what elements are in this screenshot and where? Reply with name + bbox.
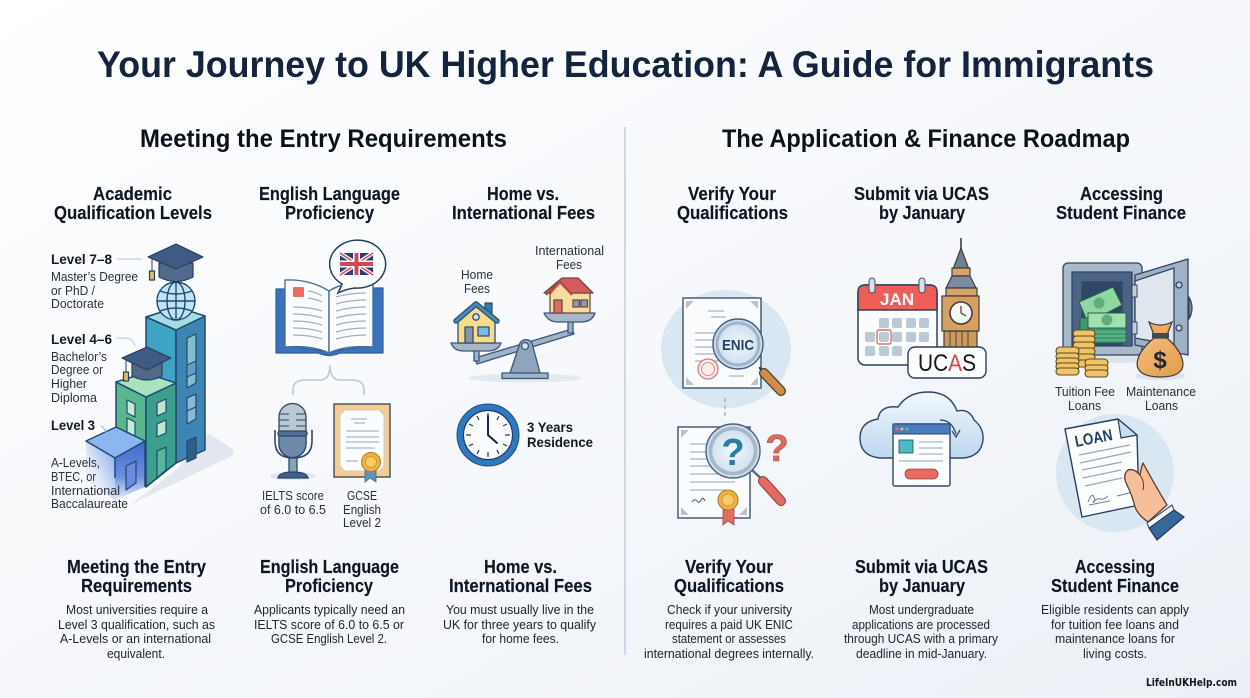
icon: certificate with enic magnifier <box>683 298 781 391</box>
panel: home vs international fees <box>443 184 604 646</box>
body text: UK for three years to qualify <box>443 617 596 632</box>
column heading: English Language <box>259 184 400 204</box>
bottom heading <box>855 557 988 596</box>
body text: requires a paid UK ENIC <box>665 617 793 632</box>
column heading <box>677 184 788 223</box>
bottom heading <box>449 557 592 596</box>
icon: certificate with question magnifier <box>678 424 789 525</box>
title: Your Journey to UK Higher Education: A Guide for Immigrants <box>97 44 1154 85</box>
level 3 label: BTEC, or <box>51 469 97 484</box>
column heading <box>259 184 400 223</box>
labels: fee types: International <box>535 243 604 258</box>
level 4-6 label <box>51 331 135 405</box>
level 3 label <box>51 417 128 511</box>
icon: coin stacks <box>1056 330 1108 377</box>
icon: january calendar: JAN <box>880 290 914 309</box>
body text: Applicants typically need an <box>254 602 405 617</box>
icon: big ben <box>942 238 979 351</box>
column heading <box>854 184 989 223</box>
label: 3 years residence: 3 Years <box>527 419 573 435</box>
bottom heading: Verify Your <box>685 557 773 577</box>
labels: ielts and gcse: of 6.0 to 6.5 <box>260 502 326 517</box>
level 7-8 label: Master’s Degree <box>51 269 138 284</box>
icon: home fees house <box>456 303 497 343</box>
level 4-6 label: Higher <box>51 376 88 391</box>
icon: globe <box>157 282 195 320</box>
labels: ielts and gcse: English <box>343 502 381 517</box>
column heading: Qualifications <box>677 203 788 223</box>
level 7-8 label: Level 7–8 <box>51 251 112 267</box>
body text: A-Levels or an international <box>60 631 211 646</box>
icon: clock <box>457 404 519 466</box>
icon: certificate with enic magnifier: ENIC <box>722 337 754 354</box>
bottom heading <box>260 557 399 596</box>
labels: fee types: Fees <box>556 257 582 272</box>
column heading: Proficiency <box>285 203 374 223</box>
icon: loan document in hand: LOAN <box>1074 427 1114 451</box>
body text: maintenance loans for <box>1055 631 1176 646</box>
label: 3 years residence <box>527 419 593 450</box>
column heading <box>1056 184 1186 223</box>
section heading: entry requirements: Meeting the Entry Requirements <box>140 125 507 153</box>
icon: banknotes <box>1079 287 1126 343</box>
column heading: Qualification Levels <box>54 203 212 223</box>
labels: fee types: Fees <box>464 281 490 296</box>
icon: open book <box>276 280 383 356</box>
labels: ielts and gcse: GCSE <box>347 488 377 503</box>
icon: cloud with browser window <box>860 392 983 486</box>
column heading: Accessing <box>1080 184 1163 204</box>
bottom heading: International Fees <box>449 576 592 596</box>
level 4-6 label: Level 4–6 <box>51 331 112 347</box>
body text: statement or assesses <box>672 631 786 646</box>
column heading: Home vs. <box>487 184 559 204</box>
column heading <box>452 184 595 223</box>
labels: fee types: Home <box>461 267 493 282</box>
level 7-8 label <box>51 251 142 311</box>
body text: Most undergraduate <box>869 602 974 617</box>
column heading: Submit via UCAS <box>854 184 989 204</box>
ucas badge <box>908 347 986 378</box>
level 3 label: A-Levels, <box>51 455 100 470</box>
bottom heading: Submit via UCAS <box>855 557 988 577</box>
level 4-6 label: Diploma <box>51 390 98 405</box>
body text: Level 3 qualification, such as <box>58 617 215 632</box>
body text <box>844 602 998 661</box>
icon: certificate with question magnifier: ? <box>721 432 745 474</box>
body text: Most universities require a <box>66 602 209 617</box>
panel: verify your qualifications <box>644 184 814 661</box>
labels: fee types <box>461 243 604 296</box>
icon: small graduation cap <box>122 347 171 381</box>
bottom heading <box>674 557 784 596</box>
icon: money bag <box>1134 322 1186 380</box>
body text: GCSE English Level 2. <box>271 631 387 646</box>
bottom heading: English Language <box>260 557 399 577</box>
body text: deadline in mid-January. <box>856 646 987 661</box>
icon: january calendar <box>858 278 937 365</box>
body text: living costs. <box>1083 646 1147 661</box>
body text <box>1041 602 1189 661</box>
body text <box>254 602 405 646</box>
body text <box>58 602 215 661</box>
bottom heading: Student Finance <box>1051 576 1179 596</box>
label: 3 years residence: Residence <box>527 434 593 450</box>
body text: through UCAS with a primary <box>844 631 998 646</box>
body text: IELTS score of 6.0 to 6.5 or <box>254 617 405 632</box>
body text: international degrees internally. <box>644 646 814 661</box>
level 3 label: International <box>51 483 120 498</box>
bottom heading <box>1051 557 1179 596</box>
ucas badge: UCAS <box>918 350 976 377</box>
section heading: application roadmap: The Application & Finance Roadmap <box>722 125 1130 153</box>
panel: submit via ucas <box>844 184 998 661</box>
icon: loan document in hand <box>1065 419 1184 540</box>
level 7-8 label: or PhD / <box>51 283 95 298</box>
panel: academic qualification levels <box>51 184 234 661</box>
level 7-8 label: Doctorate <box>51 296 104 311</box>
labels: ielts and gcse: Level 2 <box>343 515 381 530</box>
body text <box>644 602 814 661</box>
icon: balance scale <box>451 313 595 382</box>
bottom heading: Accessing <box>1075 557 1155 577</box>
labels: loan types: Tuition Fee <box>1055 384 1115 399</box>
column heading: by January <box>879 203 965 223</box>
labels: loan types: Maintenance <box>1126 384 1196 399</box>
body text <box>443 602 596 646</box>
body text: applications are processed <box>852 617 990 632</box>
labels: loan types <box>1055 384 1196 413</box>
bottom heading <box>67 557 206 596</box>
labels: loan types: Loans <box>1068 398 1101 413</box>
level 3 label: Baccalaureate <box>51 496 128 511</box>
body text: You must usually live in the <box>446 602 594 617</box>
body text: equivalent. <box>107 646 165 661</box>
body text: Check if your university <box>667 602 792 617</box>
panel: accessing student finance <box>1041 184 1196 661</box>
bottom heading: by January <box>879 576 965 596</box>
labels: ielts and gcse <box>260 488 381 530</box>
column heading: Verify Your <box>688 184 776 204</box>
icon: gcse certificate <box>334 404 390 482</box>
labels: ielts and gcse: IELTS score <box>262 488 324 503</box>
labels: loan types: Loans <box>1145 398 1178 413</box>
bottom heading: Home vs. <box>484 557 557 577</box>
icon: large graduation cap <box>148 244 203 282</box>
level 3 label: Level 3 <box>51 417 95 433</box>
icon: open safe <box>1063 259 1192 363</box>
column heading: Student Finance <box>1056 203 1186 223</box>
body text: Eligible residents can apply <box>1041 602 1189 617</box>
column heading: International Fees <box>452 203 595 223</box>
icon: microphone <box>270 404 316 480</box>
bottom heading: Proficiency <box>285 576 373 596</box>
level 4-6 label: Degree or <box>51 362 104 377</box>
icon: money bag: $ <box>1153 347 1167 374</box>
body text: for home fees. <box>482 631 559 646</box>
icon: international fees house <box>544 278 593 313</box>
body text: for tuition fee loans and <box>1051 617 1179 632</box>
panel: english language proficiency <box>254 184 405 646</box>
illustration: stepped buildings <box>86 307 234 505</box>
level 4-6 label: Bachelor’s <box>51 349 107 364</box>
bottom heading: Requirements <box>81 576 192 596</box>
bottom heading: Meeting the Entry <box>67 557 206 577</box>
column heading: Academic <box>93 184 172 204</box>
column heading <box>54 184 212 223</box>
icon: certificate with question magnifier: ? <box>765 428 789 470</box>
icon: speech bubble with union flag <box>330 240 386 293</box>
bottom heading: Qualifications <box>674 576 784 596</box>
